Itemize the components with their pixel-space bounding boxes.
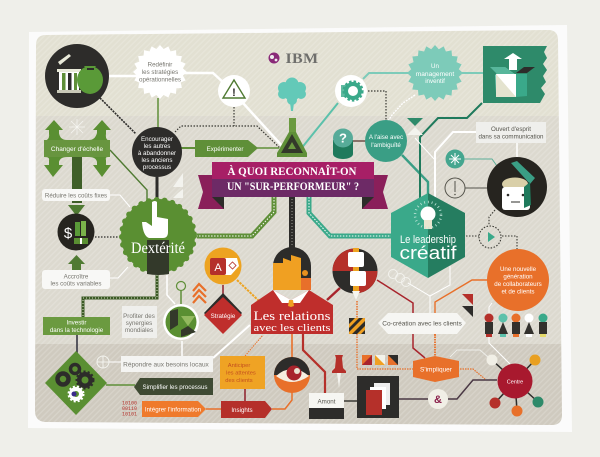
IBM logo: [268, 51, 318, 67]
diamond: gears: [45, 351, 107, 415]
icon: warning circle: !: [232, 87, 236, 99]
hexagon: Le leadership créatif: [391, 193, 465, 278]
chain rings: [388, 270, 410, 286]
scalloped circle: Dextérité: Dextérité: [131, 240, 185, 257]
heading banner: À QUOI RECONNAÎT-ON: [228, 164, 357, 178]
box: Accroître les coûts variables: Accroître: [64, 274, 89, 280]
starburst: Redéfinir les stratégies opérationnelles: Redéfinir: [148, 62, 172, 68]
starburst: Redéfinir les stratégies opérationnelles: [133, 45, 187, 99]
box: Amont: Amont: [318, 398, 336, 406]
box: Anticiper les attentes des clients: Anticiper: [228, 363, 250, 369]
circle: Une nouvelle génération: et de clients: [501, 288, 535, 296]
starburst: Un management inventif: [407, 45, 463, 101]
circle: Une nouvelle génération: Une nouvelle: [500, 266, 537, 273]
icon: plus ring: [97, 356, 109, 368]
background panel: [30, 25, 570, 430]
starburst: Un management inventif: inventif: [425, 78, 445, 85]
box: Investir dans la technologie: dans la technologie: [50, 327, 104, 334]
label: S'impliquer: [413, 356, 459, 382]
icon: handshake circle: [332, 248, 378, 300]
ampersand circle: &: [434, 394, 442, 406]
binary code: 00110: [122, 406, 137, 412]
icon: head with hair: [273, 247, 311, 290]
icon: document stack square: [357, 376, 399, 418]
circle: Encourager les autres: Encourager: [141, 136, 173, 143]
hexagon: Le leadership créatif: Le leadership: [400, 234, 456, 246]
box: Profiter des synergies mondiales: synergies: [126, 320, 152, 327]
network: Centre with satellites: Centre: [507, 380, 523, 386]
icon: A circle: A: [214, 262, 222, 274]
box: Ouvert d'esprit: Ouvert d'esprit: [491, 126, 531, 133]
panel: Les relations avec les clients: avec les clients: [254, 323, 331, 334]
box: Anticiper les attentes des clients: [220, 356, 265, 389]
icon: question cylinder: [333, 128, 353, 159]
icon: chevrons: [193, 284, 206, 303]
icon: striped square: [349, 318, 365, 334]
box: Profiter des synergies mondiales: mondiales: [125, 327, 153, 334]
label: Expérimenter: Expérimenter: [207, 146, 243, 153]
decorative triangle pair: [407, 118, 423, 135]
network: Centre with satellites: [486, 354, 544, 416]
icon: thin asterisk: [69, 119, 85, 135]
arrows: Changer d'échelle: [44, 120, 111, 203]
heading banner: [198, 162, 388, 209]
icon: robot head circle: [487, 157, 547, 217]
box: Anticiper les attentes des clients: les attentes: [226, 370, 256, 376]
label: Insights: Insights: [231, 407, 253, 414]
label: Simplifier les processus: [134, 378, 213, 395]
box: Ouvert d'esprit: [476, 122, 546, 143]
ampersand circle: [428, 389, 448, 409]
IBM logo: IBM: [286, 51, 318, 67]
arrow: up to dollar: [68, 255, 85, 270]
icon: five people: [484, 314, 548, 337]
heading banner: UN "SUR-PERFORMEUR" ?: [227, 181, 359, 193]
circle: Encourager les autres: les anciens: [142, 157, 172, 164]
banner connector: dark column: [289, 196, 295, 248]
icon: synergy circle: [163, 304, 199, 340]
circle: Encourager les autres: les autres: [144, 143, 170, 150]
label: Co-création avec les clients: [378, 313, 466, 334]
circle: A l'aise avec l'ambiguïté: A l'aise avec: [369, 134, 403, 141]
label: Expérimenter: [195, 140, 258, 157]
icon: dollar and coins circle: $: [64, 225, 73, 242]
banner connector: teal dotted path: [309, 197, 392, 236]
circle: Une nouvelle génération: génération: [503, 274, 533, 280]
icon: asterisk circle: [446, 150, 464, 168]
circle: A l'aise avec l'ambiguïté: [365, 120, 407, 162]
banner connector: green dotted path: [197, 197, 274, 236]
binary code: [122, 400, 137, 418]
panel: Les relations avec les clients: [251, 290, 333, 334]
diamond: Stratégie: [204, 293, 242, 334]
decorative triangles: [462, 294, 473, 317]
circle: Encourager les autres: à abandonner: [138, 150, 176, 157]
icon: A circle: [204, 248, 242, 284]
box: Investir dans la technologie: Investir: [67, 320, 86, 326]
icon: push pin: [332, 355, 346, 388]
label: S'impliquer: S'impliquer: [420, 366, 453, 374]
starburst: Redéfinir les stratégies opérationnelles: opérationnelles: [139, 76, 181, 84]
icon: teal cloud: [278, 78, 306, 111]
icon: question cylinder: ?: [339, 130, 347, 146]
three small squares: [362, 355, 398, 365]
diamond: Stratégie: Stratégie: [211, 313, 236, 320]
box: Réduire les coûts fixes: [42, 189, 110, 201]
box: Ouvert d'esprit: dans sa communication: [478, 134, 544, 140]
box: Amont: [309, 393, 344, 419]
box: Répondre aux besoins locaux: [121, 356, 213, 372]
icon: dollar and coins circle: [58, 214, 94, 250]
decorative triangles near Encourager: [173, 173, 183, 198]
icon: green box with arrow: [483, 46, 547, 103]
box: Accroître les coûts variables: les coûts variables: [51, 280, 101, 288]
label: Intégrer l'information: Intégrer l'information: [145, 406, 202, 414]
icon: trash and bag circle: [45, 44, 109, 108]
starburst: Un management inventif: management: [416, 71, 454, 78]
binary code: 10101: [122, 412, 137, 418]
connector lines: [77, 73, 517, 409]
starburst: Un management inventif: Un: [431, 63, 440, 70]
binary code: 10100: [122, 400, 137, 406]
small ring node: [176, 282, 186, 290]
arrow: down to dollar: [68, 205, 85, 216]
circle: A l'aise avec l'ambiguïté: l'ambiguïté: [371, 142, 401, 149]
circle: Une nouvelle génération: [487, 249, 549, 311]
icon: exclamation circle: [445, 178, 465, 198]
scalloped circle: Dextérité: [121, 199, 195, 275]
circle: Une nouvelle génération: de collaborateurs: [494, 281, 542, 288]
panel: Les relations avec les clients: Les relations: [254, 308, 330, 323]
icon: dotted play circle: [479, 226, 501, 248]
box: Accroître les coûts variables: [42, 270, 110, 289]
box: Réduire les coûts fixes: Réduire les coûts fixes: [45, 192, 107, 200]
label: Co-création avec les clients: Co-création avec les clients: [382, 320, 462, 328]
label: Insights: [221, 401, 272, 418]
starburst: Redéfinir les stratégies opérationnelles: les stratégies: [142, 69, 178, 76]
label: Intégrer l'information: [142, 401, 206, 417]
icon: eye circle: [274, 357, 310, 393]
label: Simplifier les processus: Simplifier les processus: [142, 384, 208, 391]
icon: flask: [277, 118, 307, 157]
box: Répondre aux besoins locaux: Répondre aux besoins locaux: [123, 362, 210, 368]
icon: gear circle: [335, 75, 367, 107]
icon: warning circle: [218, 75, 250, 107]
circle: Encourager les autres: processus: [143, 164, 171, 171]
box: Profiter des synergies mondiales: [122, 306, 157, 338]
arrows: Changer d'échelle: Changer d'échelle: [51, 146, 103, 153]
box: Anticiper les attentes des clients: des clients: [225, 378, 253, 384]
hexagon: Le leadership créatif: créatif: [400, 243, 458, 263]
circle: Encourager les autres: [132, 127, 182, 177]
box: Profiter des synergies mondiales: Profiter des: [123, 313, 155, 320]
box: Investir dans la technologie: [43, 317, 110, 335]
